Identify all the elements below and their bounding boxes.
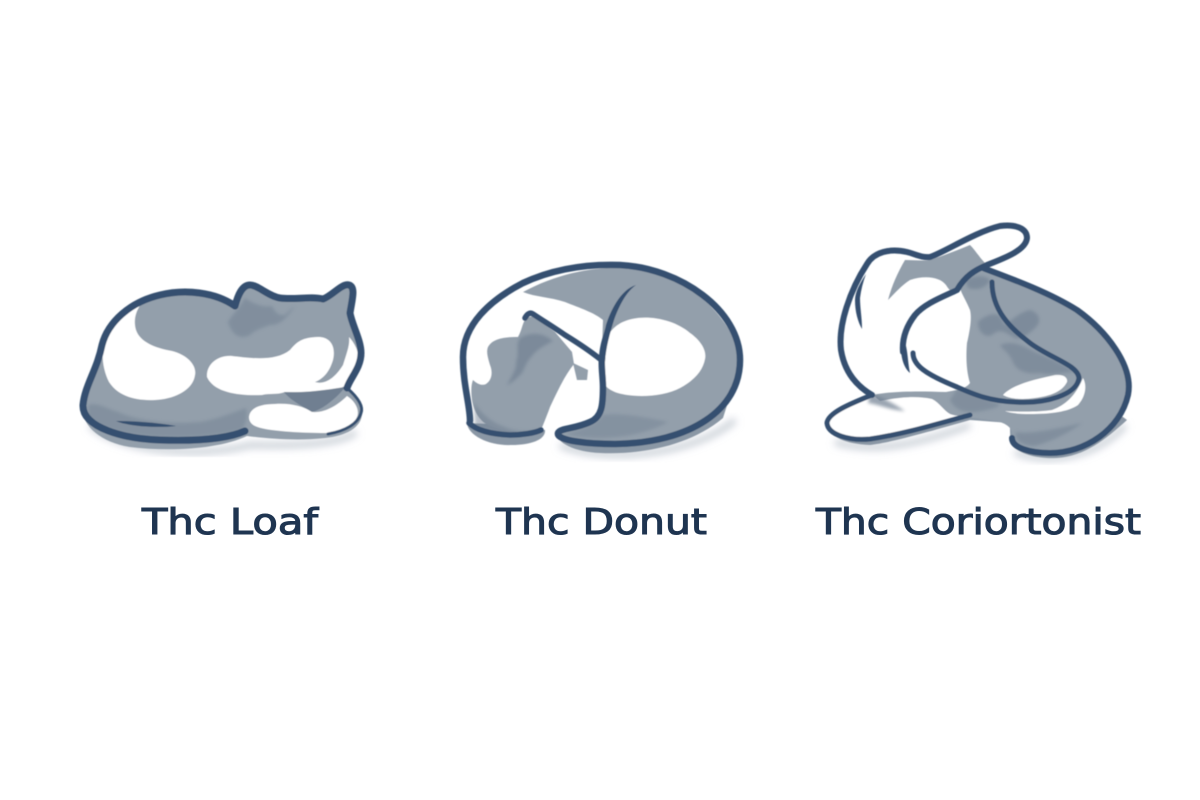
contortionist left limb white bbox=[828, 396, 968, 438]
icon: loaf cat bbox=[83, 285, 362, 452]
contortionist stripe shading bbox=[978, 310, 1039, 338]
contortionist neck shading bbox=[965, 276, 990, 289]
loaf ear shading bbox=[228, 298, 295, 337]
contortionist left leg outline bbox=[827, 395, 970, 439]
donut head and chest bbox=[471, 316, 574, 432]
label: The Loaf: Thc Loaf bbox=[141, 502, 320, 543]
donut foot shading bbox=[474, 402, 540, 433]
contortionist inner curve bbox=[913, 282, 1079, 402]
contortionist flank shading bbox=[1000, 343, 1075, 374]
donut chin bbox=[573, 363, 588, 380]
donut lower shading bbox=[565, 414, 668, 438]
loaf body bbox=[83, 285, 362, 449]
loaf white shoulder patch bbox=[207, 337, 358, 395]
donut spine line bbox=[599, 285, 636, 362]
donut white belly bbox=[603, 318, 705, 396]
contortionist band shading bbox=[950, 388, 1000, 412]
contortionist cheek taper bbox=[901, 346, 910, 373]
donut outline bbox=[463, 265, 740, 444]
donut ring bbox=[523, 267, 739, 444]
panel: The Donut bbox=[463, 265, 740, 455]
icon: contortionist cat bbox=[827, 226, 1130, 458]
contortionist back outline bbox=[983, 268, 1129, 453]
contortionist tail white strip bbox=[1005, 378, 1085, 414]
loaf paw outline bbox=[328, 388, 362, 434]
loaf white paw bbox=[249, 396, 358, 433]
contortionist inner white bbox=[1003, 375, 1067, 399]
contortionist whisker bbox=[855, 274, 866, 329]
loaf belly shading bbox=[88, 404, 247, 437]
loaf neck shading bbox=[284, 387, 345, 412]
loaf outline bbox=[83, 285, 361, 440]
contortionist silhouette shadow bbox=[827, 400, 1127, 458]
donut foot line bbox=[469, 423, 541, 435]
contortionist leg shading bbox=[868, 394, 905, 411]
contortionist lower band bbox=[873, 391, 985, 416]
label: The Donut: Thc Donut bbox=[495, 502, 707, 543]
label: The Contortionist: Thc Coriortonist bbox=[815, 502, 1141, 543]
loaf white hip patch bbox=[103, 303, 195, 400]
contortionist body bbox=[935, 266, 1130, 453]
panel: The Loaf bbox=[83, 285, 362, 452]
donut arm line bbox=[525, 313, 600, 359]
contortionist tail shading bbox=[1016, 423, 1082, 446]
donut head shading bbox=[507, 334, 553, 385]
icon: donut cat bbox=[463, 265, 740, 455]
loaf belly line bbox=[116, 421, 176, 427]
panel: The Contortionist bbox=[827, 226, 1130, 458]
contortionist top wedge bbox=[888, 245, 985, 300]
donut foot shadow bbox=[467, 423, 545, 445]
donut body shadow bbox=[556, 380, 735, 453]
contortionist head outline bbox=[841, 226, 1027, 395]
